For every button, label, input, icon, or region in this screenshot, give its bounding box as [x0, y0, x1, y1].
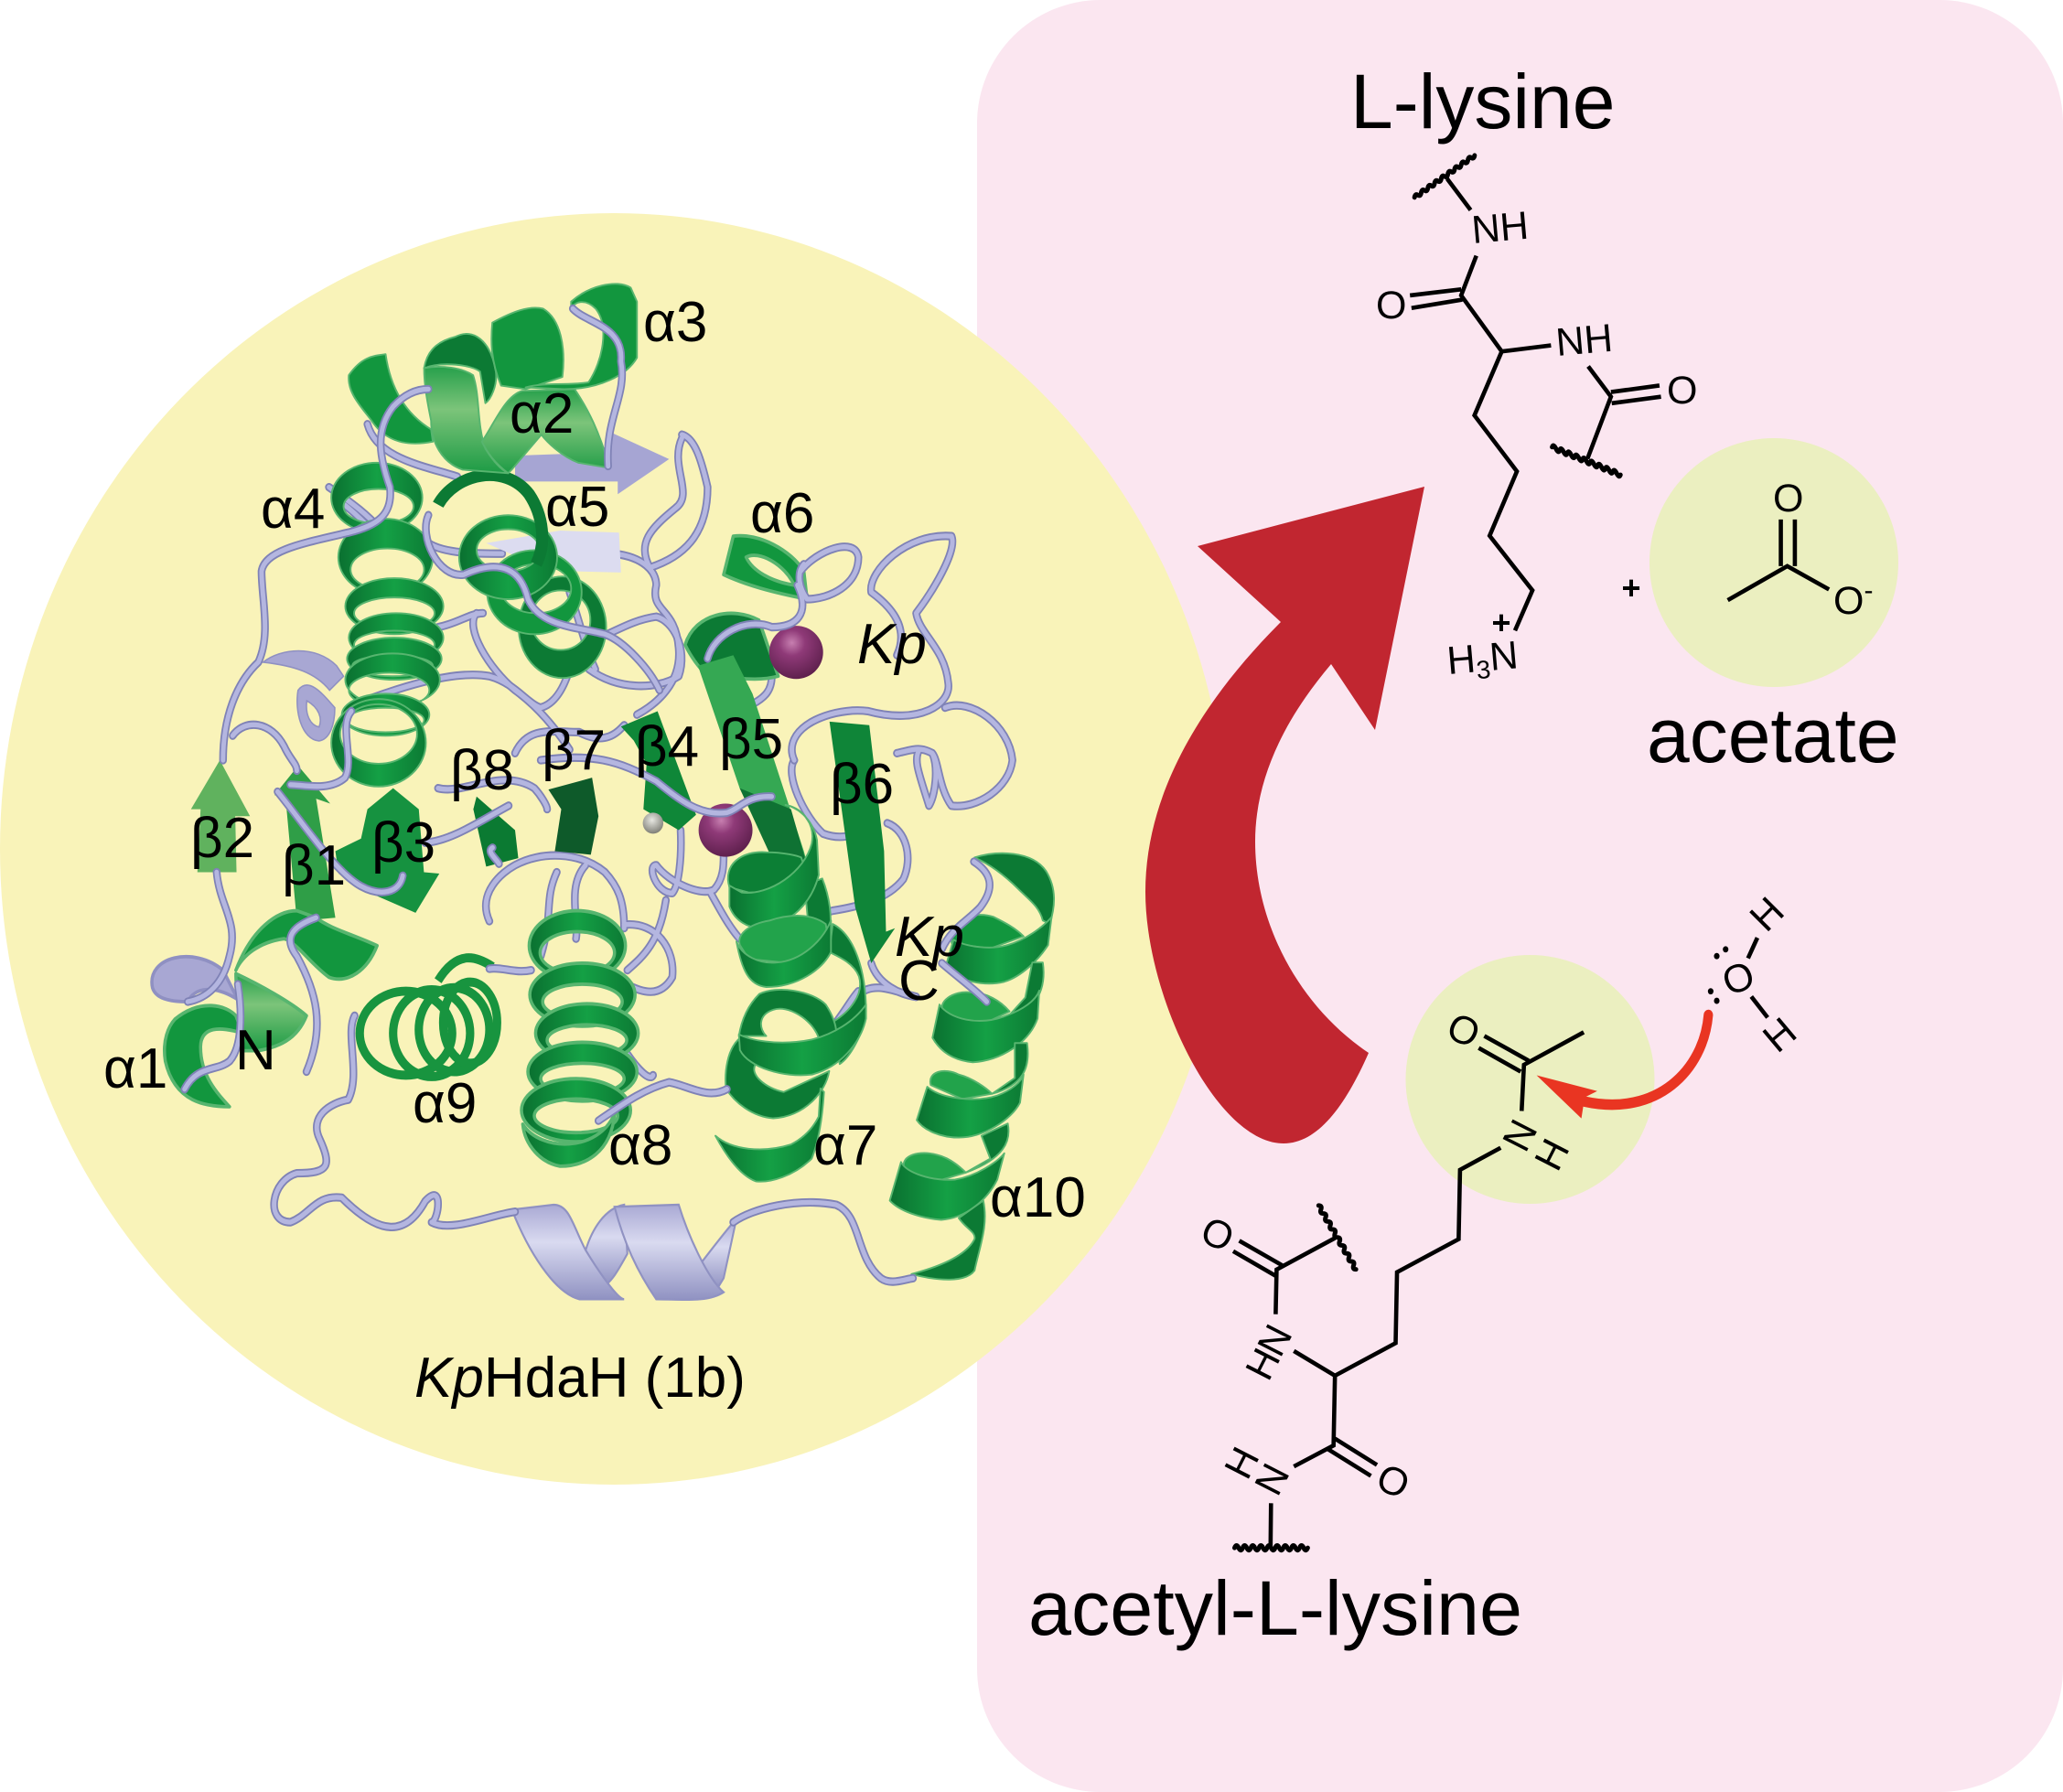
back coil loops [329, 424, 916, 1077]
beta strand 2 [191, 760, 250, 872]
panel: pink reaction background [977, 0, 2063, 1792]
red reaction arrow [1145, 487, 1424, 1143]
chemical structure: L-lysine: 3 [1475, 655, 1492, 684]
protein labels: β6 [830, 753, 894, 816]
beta strand 7 [548, 778, 598, 854]
chemical structure: L-lysine: NH [1470, 204, 1531, 252]
water molecule [1708, 889, 1805, 1061]
water molecule: H [1755, 1009, 1805, 1061]
label: acetyl-L-lysine: acetyl-L-lysine [1028, 1565, 1522, 1651]
chemical structure: L-lysine: NH [1554, 317, 1615, 365]
protein labels: β1 [282, 834, 346, 897]
protein caption: KpHdaH (1b) [414, 1347, 746, 1410]
protein labels: α5 [545, 476, 609, 539]
protein labels: β7 [542, 719, 606, 782]
chemical structure: acetate [1728, 477, 1873, 623]
chemical structure: L-lysine: O [1376, 284, 1406, 327]
helix alpha 6 [724, 536, 807, 599]
helix alpha 10 [890, 853, 1054, 1280]
chemical structure: acetate: - [1864, 575, 1873, 606]
acetate highlight circle [1649, 438, 1898, 687]
beta strand 1 [274, 766, 336, 921]
chemical structure: acetyl-L-lysine: N [1494, 1113, 1546, 1158]
helix alpha 1 [152, 911, 377, 1107]
protein labels: Kp [857, 613, 927, 676]
chemical structure: L-lysine: H [1445, 637, 1477, 683]
protein labels: α6 [750, 482, 814, 545]
beta strand 3 [336, 789, 439, 913]
lavender strands at top [486, 433, 669, 573]
chemical structure: L-lysine: N [1488, 633, 1520, 680]
red curved arrow: nucleophilic attack [1537, 1015, 1708, 1119]
chemical structure: L-lysine [1376, 156, 1697, 687]
lavender helix left [263, 650, 344, 741]
plus sign: + [1621, 569, 1641, 606]
protein labels: α8 [608, 1114, 672, 1177]
protein labels: β3 [371, 811, 435, 875]
protein labels: α9 [413, 1072, 477, 1135]
helix alpha 5 [438, 475, 607, 678]
chemical structure: acetyl-L-lysine: N [1246, 1457, 1298, 1502]
protein labels: Kp [895, 906, 964, 969]
chemical structure: L-lysine: + [1491, 604, 1511, 641]
protein ribbon structure [152, 284, 1054, 1300]
water molecule: O [1716, 953, 1760, 1004]
helix alpha 9 [360, 958, 497, 1077]
protein labels: α3 [643, 291, 707, 354]
helix alpha 8 [521, 911, 639, 1166]
chemical structure: acetyl-L-lysine: O [1440, 1004, 1487, 1057]
protein labels: α10 [990, 1166, 1086, 1229]
beta strand 8 [473, 797, 518, 866]
helix alpha 4 [331, 463, 444, 787]
protein labels: β8 [450, 739, 514, 802]
protein labels: α4 [261, 478, 325, 541]
chemical structure: acetyl-L-lysine [1194, 1004, 1584, 1551]
beta strand 5 shaded tail [740, 789, 820, 911]
title: L-lysine: L-lysine [1350, 59, 1615, 145]
label: acetate: acetate [1647, 692, 1899, 778]
chemical structure: acetyl-L-lysine: H [1216, 1441, 1268, 1486]
protein labels: α2 [510, 382, 574, 445]
protein labels: α1 [103, 1037, 167, 1100]
chemical structure: acetyl-L-lysine: O [1194, 1208, 1241, 1261]
beta strand 6 [830, 722, 895, 963]
acetyl group highlight circle [1405, 955, 1654, 1204]
lavender helix bottom [511, 1205, 736, 1300]
protein labels: α7 [813, 1114, 877, 1177]
chemical structure: L-lysine: O [1667, 369, 1697, 413]
chemical structure: acetyl-L-lysine: O [1370, 1455, 1416, 1508]
chemical structure: acetate: O [1833, 579, 1864, 623]
metal ion spheres [643, 626, 823, 857]
panel: yellow protein circle [0, 213, 1228, 1485]
protein labels: β5 [719, 708, 783, 771]
protein labels [103, 291, 1086, 1229]
beta strands [191, 655, 895, 963]
protein labels: β2 [190, 807, 254, 870]
protein labels: β4 [635, 715, 699, 778]
chemical structure: acetyl-L-lysine: N [1249, 1318, 1301, 1363]
protein labels: C [898, 950, 940, 1013]
protein labels: N [235, 1019, 276, 1082]
beta strand 4 [621, 711, 696, 831]
helix alpha 7 [715, 805, 866, 1182]
front coil loops [185, 308, 1013, 1282]
beta strand 5 [698, 655, 820, 911]
chemical structure: acetyl-L-lysine: H [1526, 1132, 1578, 1177]
chemical structure: acetate: O [1773, 477, 1803, 520]
water molecule: H [1742, 889, 1793, 940]
second alpha 6 turn [685, 613, 779, 679]
chemical structure: acetyl-L-lysine: H [1237, 1342, 1289, 1387]
helix alpha 2 and alpha 3 top ribbons [349, 284, 637, 473]
